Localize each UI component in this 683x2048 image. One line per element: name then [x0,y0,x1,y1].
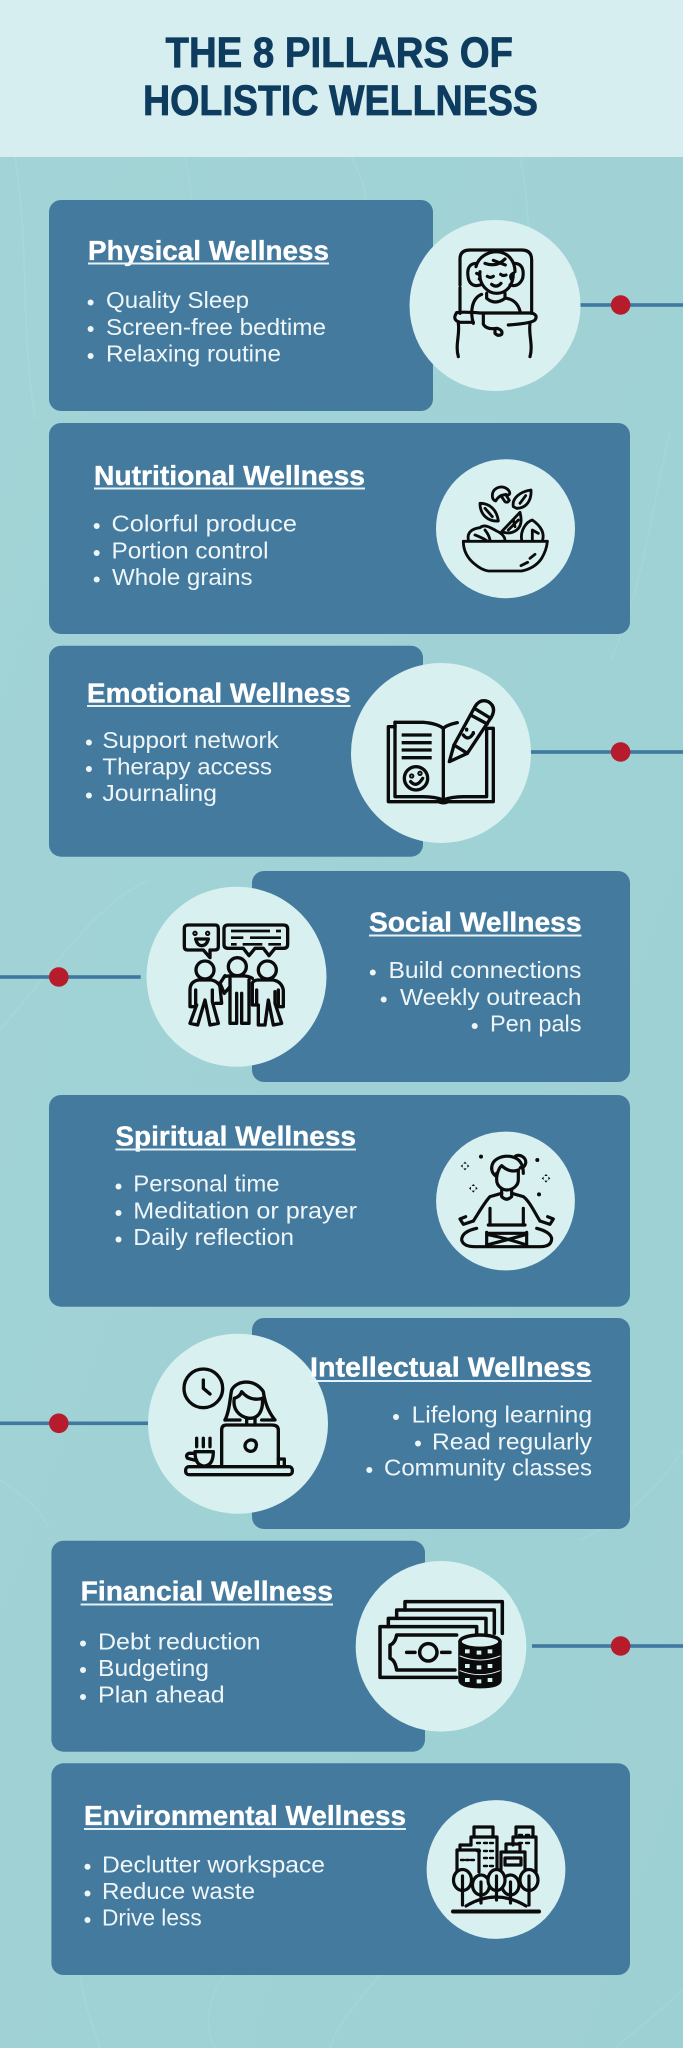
panel: nutritional [49,423,630,634]
bullet list: Weekly outreach [400,984,582,1010]
bullet list [94,511,297,590]
panel: spiritual [49,1095,630,1307]
title banner [0,0,683,157]
bullet list [370,957,582,1037]
panel: environmental [51,1763,630,1975]
heading: Physical Wellness [88,235,329,266]
bullet list: Declutter workspace [102,1851,325,1877]
bullet list: Therapy access [102,754,272,780]
bullet list [88,287,326,366]
title [143,29,538,125]
pillar: emotional wellness [49,646,683,857]
bullet list: Daily reflection [133,1224,294,1250]
bullet list: Screen-free bedtime [106,314,326,340]
bullet list: Colorful produce [112,511,297,537]
pillar: financial wellness [51,1541,683,1752]
bullet list: Relaxing routine [106,340,281,366]
icon circle: people talking [146,887,326,1067]
connector arrow line with dot [0,1414,150,1433]
bullet list [80,1628,260,1708]
pillar: spiritual wellness [49,1095,630,1307]
panel: social [252,871,630,1082]
heading: Emotional Wellness [87,678,350,708]
bullet list [116,1171,357,1250]
bullet list [84,1851,325,1931]
heading: Intellectual Wellness [310,1352,592,1383]
pillar: social wellness [0,871,630,1082]
icon circle: sleeping person [410,220,580,391]
bullet list: Meditation or prayer [133,1197,357,1223]
panel: financial [51,1541,425,1752]
bullet list: Read regularly [432,1428,593,1454]
icon circle: meditating person [436,1132,575,1270]
bullet list [86,727,279,806]
icon circle: money and coins [356,1561,526,1732]
bullet list: Support network [102,727,279,753]
heading: Spiritual Wellness [115,1120,356,1152]
icon circle: journal and pencil [351,663,531,843]
pillar: physical wellness [49,200,683,411]
connector arrow line with dot [532,1636,683,1656]
connector arrow line with dot [530,742,683,762]
icon circle: salad bowl [436,459,575,598]
bullet list [366,1402,593,1481]
heading: Nutritional Wellness [94,460,365,491]
heading: Social Wellness [369,906,582,938]
bullet list: Build connections [388,957,582,983]
bullet list: Whole grains [112,564,252,590]
panel: emotional [49,646,423,857]
bullet list: Journaling [102,780,217,806]
panel: intellectual [252,1318,630,1529]
pillar: intellectual wellness [0,1318,630,1529]
bullet list: Community classes [384,1455,592,1481]
icon circle: city and trees [427,1800,565,1939]
title: HOLISTIC WELLNESS [143,77,538,125]
title: THE 8 PILLARS OF [166,29,513,77]
bullet list: Portion control [112,537,268,563]
bullet list: Lifelong learning [412,1402,592,1428]
bullet list: Budgeting [98,1655,209,1681]
bullet list: Debt reduction [98,1628,260,1654]
connector arrow line with dot [578,295,683,315]
bullet list: Personal time [133,1171,280,1197]
bullet list: Plan ahead [98,1682,225,1708]
connector arrow line with dot [0,967,141,987]
panel: physical [49,200,433,411]
bullet list: Reduce waste [102,1878,255,1904]
heading: Environmental Wellness [84,1800,406,1831]
heading: Financial Wellness [81,1576,333,1606]
bullet list: Drive less [102,1905,202,1931]
pillar: nutritional wellness [49,423,630,634]
pillar: environmental wellness [51,1763,630,1975]
icon circle: person at laptop [148,1334,328,1514]
bullet list: Pen pals [490,1011,582,1037]
bullet list: Quality Sleep [106,287,249,313]
